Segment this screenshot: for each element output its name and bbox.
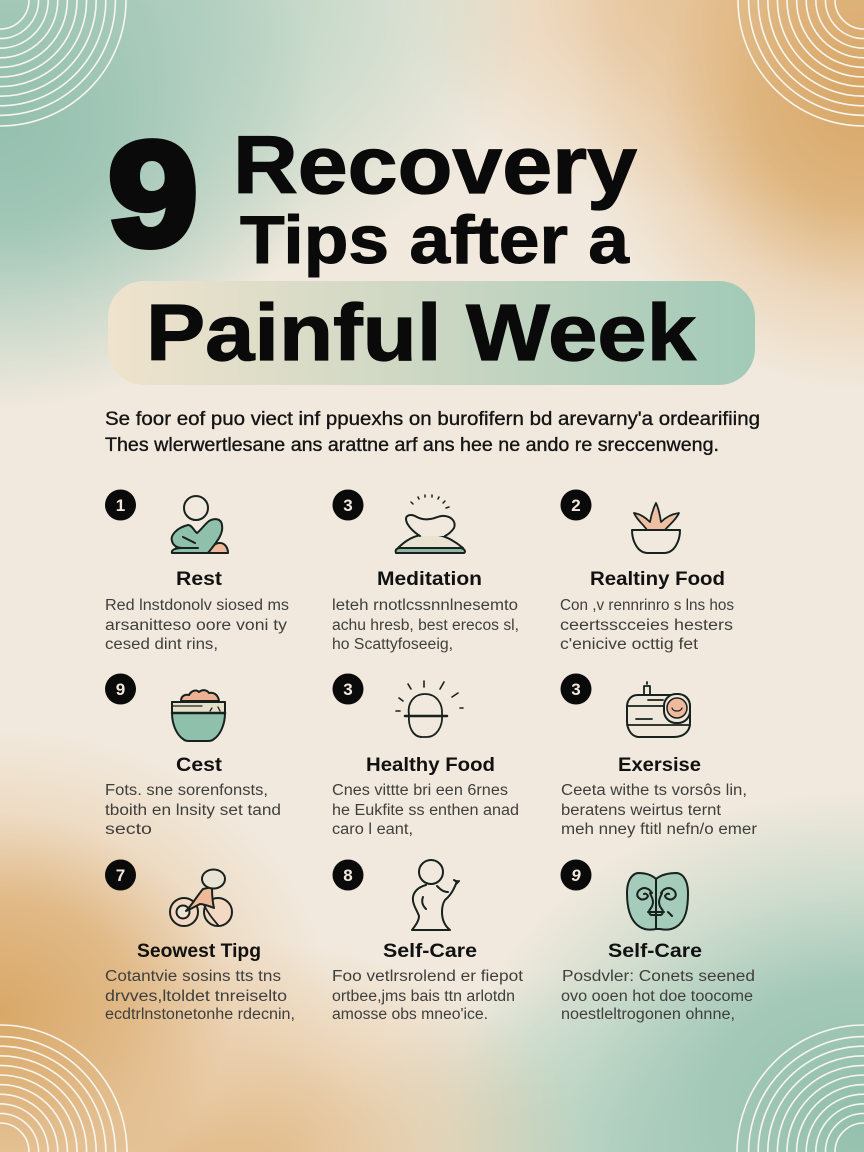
description: Con ,v rennrinro s lns hos bbox=[560, 597, 734, 614]
number badge 3: 3 bbox=[343, 496, 353, 515]
icon: figure with loops bbox=[170, 870, 232, 926]
icon: meditation cushion bbox=[396, 495, 465, 553]
description: amosse obs mneo'ice. bbox=[332, 1006, 488, 1023]
icon: pot with rays bbox=[396, 681, 463, 737]
number badge 9: 9 bbox=[571, 866, 581, 885]
description: caro l eant, bbox=[332, 821, 413, 838]
title pill: Painful Week: Painful Week bbox=[146, 288, 697, 377]
description: he Eukfite ss enthen anad bbox=[332, 802, 519, 819]
description: arsanitteso oore voni ty bbox=[105, 617, 287, 634]
number badge 2 bbox=[560, 490, 592, 520]
description: noestleltrogonen ohnne, bbox=[561, 1006, 735, 1023]
panel: tip 2 Meditation bbox=[332, 490, 519, 653]
corner rings: bottom left bbox=[0, 1025, 127, 1152]
description bbox=[332, 597, 519, 653]
panel: tip 7 Seowest Tipg bbox=[105, 860, 295, 1023]
panel: tip 5 Healthy Food bbox=[332, 674, 519, 838]
description bbox=[332, 968, 524, 1023]
title: Tips after a bbox=[240, 202, 630, 278]
heading: Seowest Tipg bbox=[137, 941, 261, 962]
number badge 3: 3 bbox=[343, 680, 353, 699]
icon: face bbox=[627, 873, 688, 930]
number badge 1: 1 bbox=[116, 496, 125, 515]
panel: tip 9 Self-Care bbox=[560, 860, 755, 1023]
heading: Meditation bbox=[377, 569, 482, 590]
heading: Realtiny Food bbox=[590, 569, 725, 590]
number badge 9 bbox=[560, 860, 592, 890]
description: leteh rnotlcssnnlnesemto bbox=[332, 597, 518, 614]
number badge 9 bbox=[105, 674, 136, 704]
description: Cotantvie sosins tts tns bbox=[105, 968, 281, 985]
icon: plant in bowl bbox=[632, 503, 680, 553]
description: drvves,ltoldet tnreiselto bbox=[105, 988, 287, 1005]
description: ovo ooen hot doe toocome bbox=[561, 988, 753, 1005]
title: 9 bbox=[108, 112, 198, 277]
number badge 9: 9 bbox=[116, 680, 125, 699]
description bbox=[561, 968, 755, 1023]
description bbox=[105, 597, 289, 653]
description: achu hresb, best erecos sl, bbox=[332, 617, 519, 634]
description bbox=[105, 782, 281, 838]
panel: tip 1 Rest bbox=[105, 490, 289, 653]
description: Foo vetlrsrolend er fiepot bbox=[332, 968, 524, 985]
number badge 3: 3 bbox=[571, 680, 581, 699]
heading: Rest bbox=[176, 569, 223, 590]
heading: Self-Care bbox=[608, 941, 702, 962]
corner rings: top right bbox=[738, 0, 864, 126]
description bbox=[105, 968, 295, 1023]
panel: tip 6 Exersise bbox=[560, 674, 757, 838]
description bbox=[560, 597, 734, 653]
number badge 8 bbox=[332, 860, 364, 890]
icon: exercise equipment bbox=[627, 682, 690, 737]
number badge 1 bbox=[105, 490, 136, 520]
description: tboith en lnsity set tand bbox=[105, 802, 281, 819]
heading: Self-Care bbox=[383, 941, 477, 962]
icon: resting person bbox=[172, 496, 228, 553]
heading: Healthy Food bbox=[366, 755, 495, 776]
description: ortbee,jms bais ttn arlotdn bbox=[332, 988, 515, 1005]
description: Posdvler: Conets seened bbox=[562, 968, 755, 985]
corner rings: bottom right bbox=[737, 1025, 864, 1152]
number badge 3 bbox=[332, 490, 364, 520]
number badge 8: 8 bbox=[343, 866, 353, 885]
description: Red lnstdonolv siosed ms bbox=[105, 597, 289, 614]
description: secto bbox=[105, 821, 152, 838]
description: Fots. sne sorenfonsts, bbox=[105, 782, 268, 799]
description: meh nney ftitl nefn/o emer bbox=[561, 821, 757, 838]
corner rings: top left bbox=[0, 0, 126, 126]
description: cesed dint rins, bbox=[105, 636, 218, 653]
title bbox=[108, 112, 637, 278]
intro text: Thes wlerwertlesane ans arattne arf ans hee ne ando re sreccenweng. bbox=[105, 435, 719, 456]
description: Cnes vittte bri een 6rnes bbox=[332, 782, 508, 799]
icon: food bowl bbox=[172, 690, 225, 741]
description: ho Scattyfoseeig, bbox=[332, 636, 453, 653]
number badge 7: 7 bbox=[116, 866, 125, 885]
description: ceertsscceies hesters bbox=[560, 617, 733, 634]
intro text bbox=[105, 409, 760, 456]
description: Ceeta withe ts vorsôs lin, bbox=[561, 782, 747, 799]
panel: tip 8 Self-Care bbox=[332, 860, 524, 1023]
number badge 3 bbox=[560, 674, 592, 704]
description: ecdtrlnstonetonhe rdecnin, bbox=[105, 1006, 295, 1023]
description bbox=[561, 782, 757, 838]
title: Recovery bbox=[233, 120, 637, 211]
number badge 7 bbox=[105, 860, 136, 890]
number badge 2: 2 bbox=[571, 496, 581, 515]
heading: Cest bbox=[176, 755, 223, 776]
panel: tip 3 Realtiny Food bbox=[560, 490, 734, 653]
heading: Exersise bbox=[618, 755, 701, 776]
description bbox=[332, 782, 519, 838]
icon: standing figure bbox=[412, 860, 459, 930]
intro text: Se foor eof puo viect inf ppuexhs on burofifern bd arevarny'a ordearifiing bbox=[105, 409, 760, 430]
panel: tip 4 Cest bbox=[105, 674, 281, 838]
description: beratens weirtus ternt bbox=[561, 802, 722, 819]
title pill: Painful Week bbox=[108, 281, 755, 385]
description: c'enicive octtig fet bbox=[560, 636, 699, 653]
number badge 3 bbox=[332, 674, 364, 704]
